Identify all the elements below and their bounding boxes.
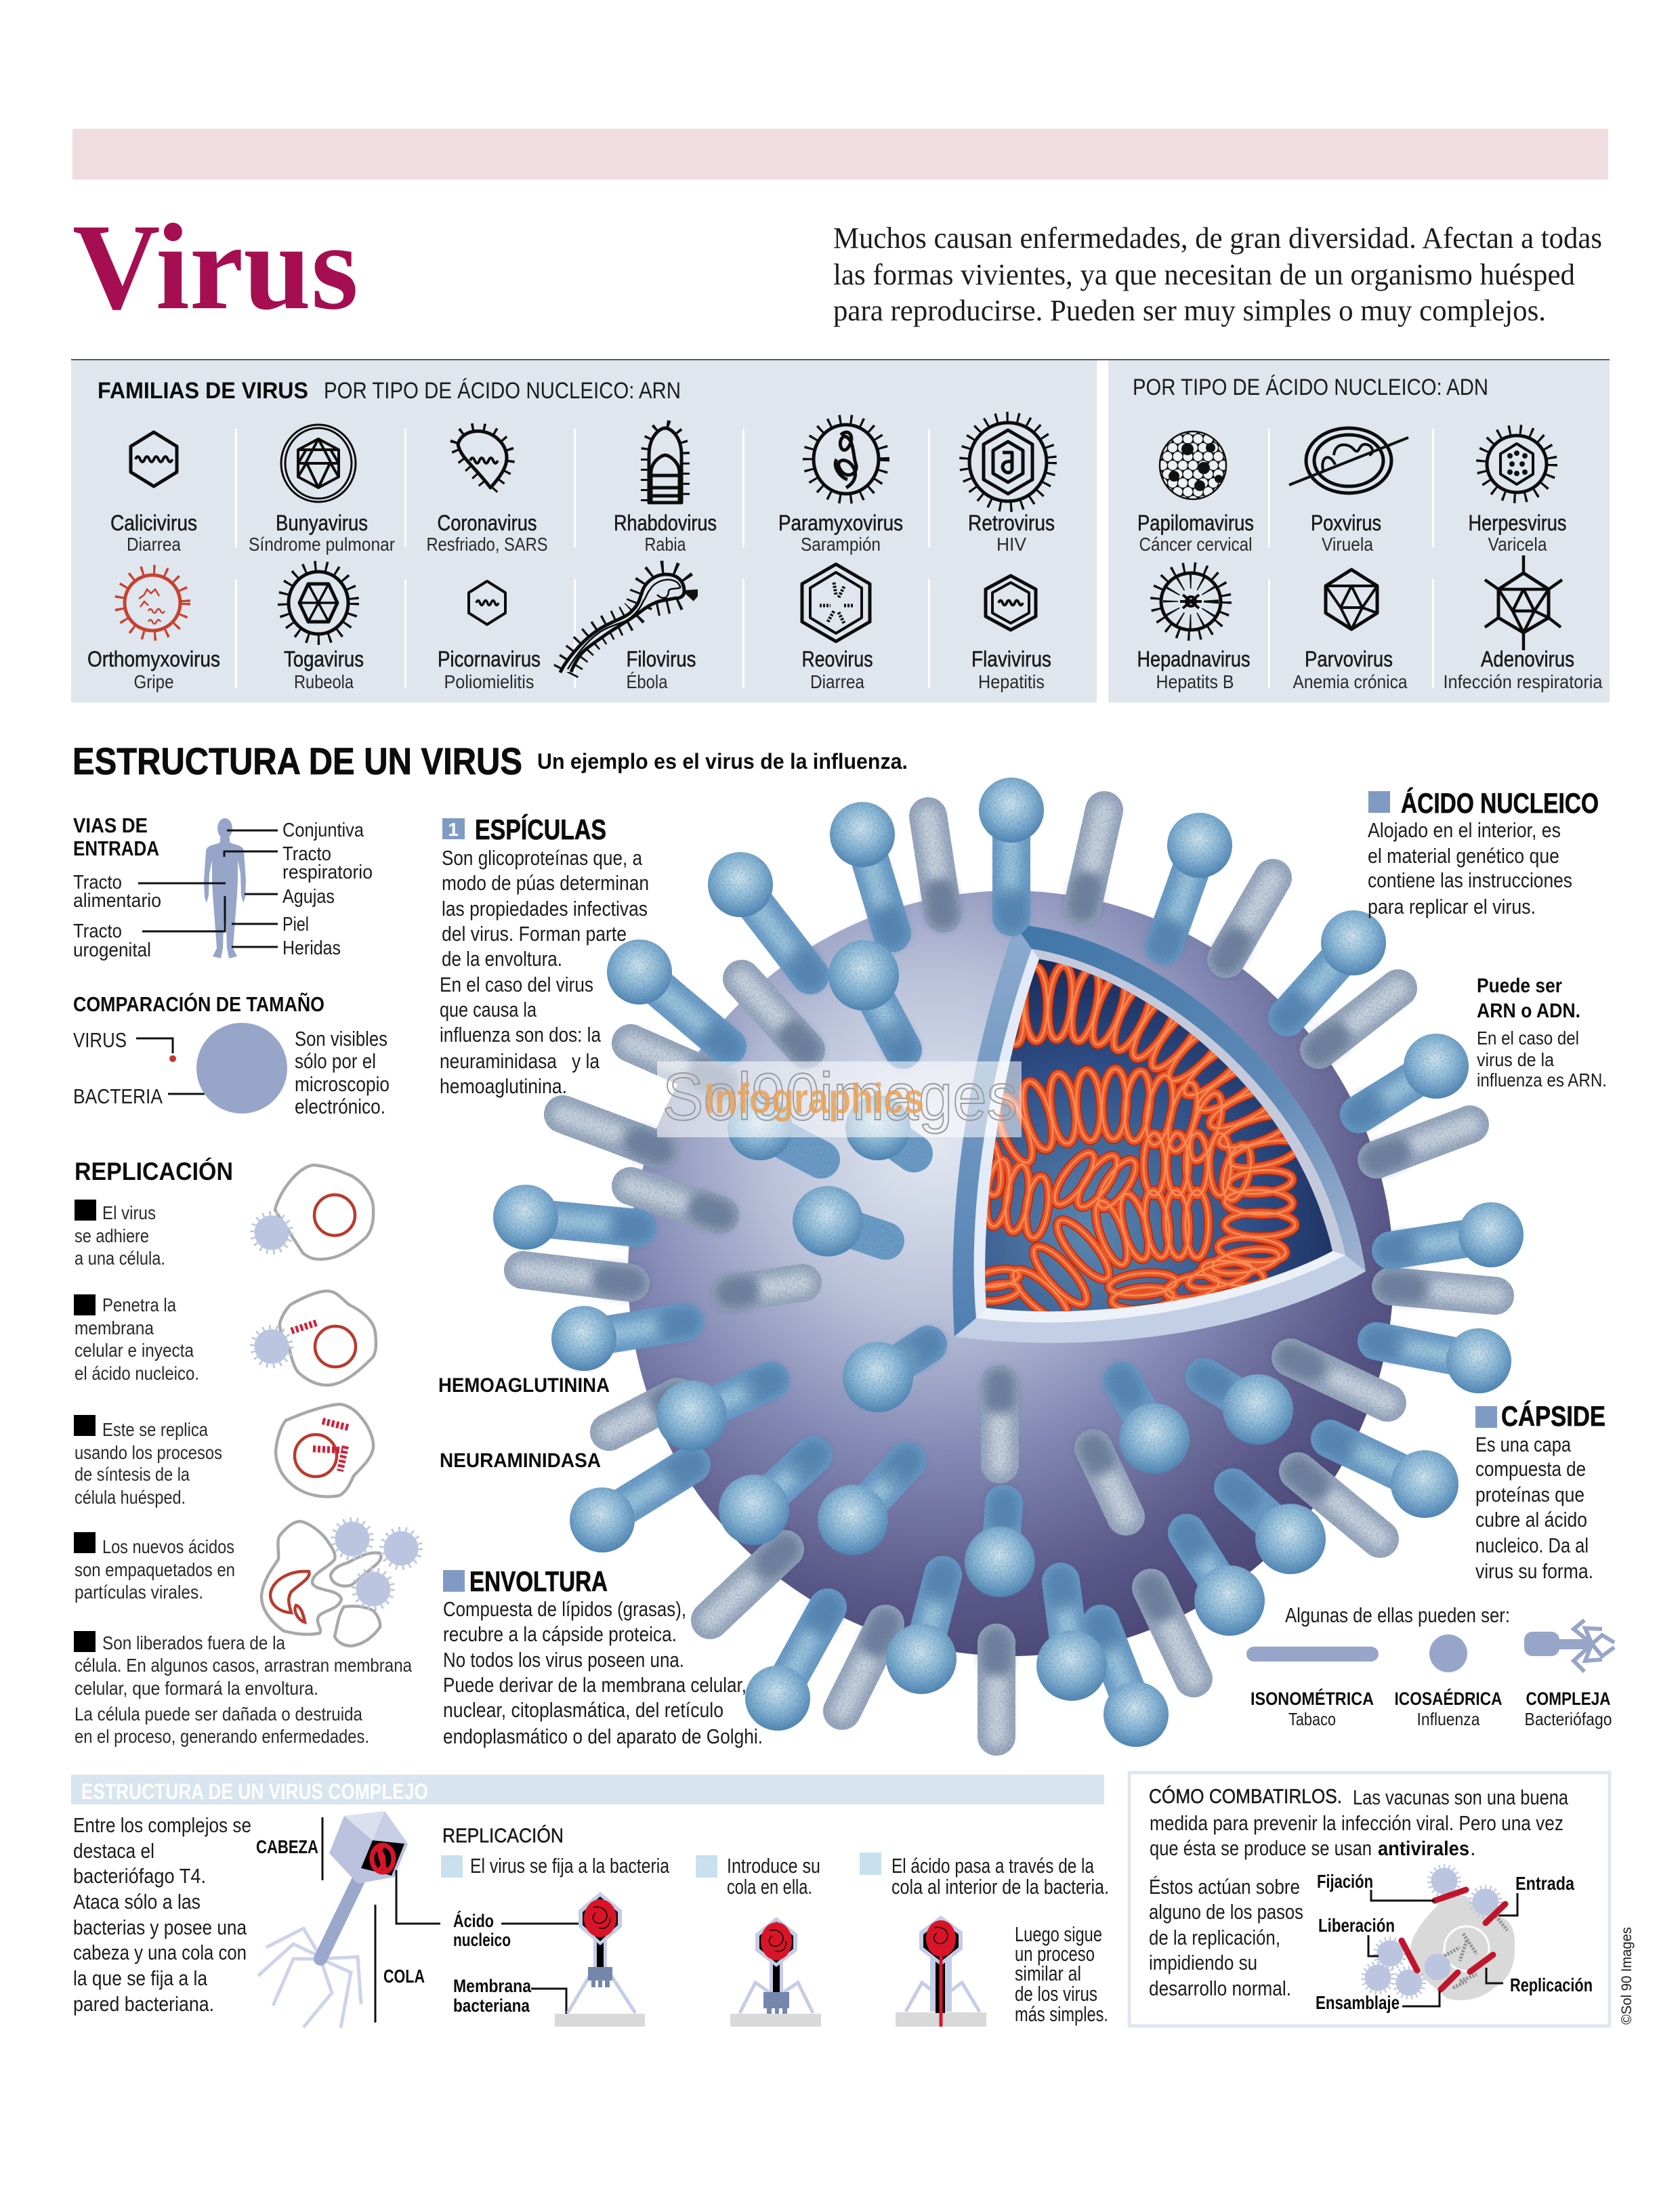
labels ARN row 2: Poliomielitis xyxy=(444,671,534,692)
step 2: membrana xyxy=(75,1317,154,1338)
icon: retrovirus xyxy=(967,420,1049,504)
combat text left: desarrollo normal. xyxy=(1149,1976,1291,2000)
heading: vias de entrada: VIAS DE xyxy=(73,813,148,837)
band heading xyxy=(71,1775,1104,1804)
panel: comparacion de tamaño: BACTERIA xyxy=(73,1084,163,1108)
step 2 text: Introduce su xyxy=(727,1854,820,1878)
heading: estructura de un virus xyxy=(72,740,908,782)
labels ARN row 2: Diarrea xyxy=(810,671,864,692)
icon: reovirus xyxy=(802,564,870,641)
bacteria circle xyxy=(196,1023,287,1114)
capsid shapes legend: Algunas de ellas pueden ser: xyxy=(1285,1603,1510,1627)
callout: especulas: hemoaglutinina. xyxy=(440,1074,567,1098)
callout: acido nucleico xyxy=(1368,787,1599,918)
entry labels: Tracto xyxy=(282,843,331,865)
panel: familias de virus ARN xyxy=(71,359,1610,702)
antiviral diagram xyxy=(1364,1867,1517,2006)
intro text xyxy=(73,1813,251,2016)
callout: arn o adn: Puede ser xyxy=(1477,975,1562,997)
closing text: de los virus xyxy=(1015,1982,1097,2006)
callout: especulas: En el caso del virus xyxy=(440,973,593,996)
copyright: ©Sol 90 Images xyxy=(1619,1927,1635,2025)
intro text: bacterias y posee una xyxy=(73,1916,247,1939)
panel: comparacion de tamaño: VIRUS xyxy=(73,1028,127,1052)
labels ARN row 2: Rubeola xyxy=(294,671,354,692)
combat text top: CÓMO COMBATIRLOS. xyxy=(1149,1785,1342,1808)
labels ARN row 1: Rabia xyxy=(645,534,686,555)
labels ARN row 2: Ébola xyxy=(626,671,668,692)
title: Virus xyxy=(72,199,358,335)
combat text left: alguno de los pasos xyxy=(1149,1900,1303,1924)
size note: microscopio xyxy=(295,1072,390,1096)
icon: isonometrica xyxy=(1246,1647,1379,1662)
labels ARN row 1: Retrovirus xyxy=(968,511,1055,535)
callout: capside: Es una capa xyxy=(1475,1433,1572,1456)
combat text top: medida para prevenir la infección viral. Pero una vez xyxy=(1150,1811,1563,1835)
entry labels: Agujas xyxy=(282,886,335,908)
combat text top: Las vacunas son una buena xyxy=(1353,1785,1569,1809)
icon: cell step 2 xyxy=(253,1291,376,1385)
size note: Son visibles xyxy=(295,1027,387,1051)
labels ADN row 2: Parvovirus xyxy=(1305,647,1393,671)
callout: envoltura: recubre a la cápside proteica. xyxy=(443,1622,677,1646)
band heading: ESTRUCTURA DE UN VIRUS COMPLEJO xyxy=(81,1779,428,1804)
icon: orthomyxovirus xyxy=(123,573,182,633)
step 2: Penetra la xyxy=(102,1294,176,1315)
step 3 text: cola al interior de la bacteria. xyxy=(891,1875,1109,1899)
callout: capside xyxy=(1475,1400,1605,1583)
icon: body silhouette xyxy=(204,818,246,958)
sphere envelope xyxy=(628,891,1393,1656)
step 4: partículas virales. xyxy=(75,1582,203,1603)
icon: adenovirus xyxy=(1485,555,1562,650)
step 5: La célula puede ser dañada o destruida xyxy=(75,1704,362,1725)
labels ARN row 1: Rhabdovirus xyxy=(614,511,717,535)
intro text: destaca el xyxy=(73,1839,154,1863)
step 5 xyxy=(74,1631,412,1747)
icon: filovirus xyxy=(560,574,684,673)
labels ADN row 1: Herpesvirus xyxy=(1469,511,1566,535)
callout: especulas xyxy=(440,813,649,1098)
step 2: celular e inyecta xyxy=(75,1340,194,1361)
labels ARN row 2: Reovirus xyxy=(802,647,873,671)
combat text left: Éstos actúan sobre xyxy=(1149,1875,1300,1899)
antiviral labels: Replicación xyxy=(1510,1974,1593,1995)
callout: capside: cubre al ácido xyxy=(1475,1508,1587,1531)
heading: estructura de un virus: ESTRUCTURA DE UN VIRUS xyxy=(72,740,522,782)
cutaway capsid xyxy=(952,925,1366,1343)
panel: comparacion de tamaño xyxy=(73,992,390,1118)
callout: capside: proteínas que xyxy=(1475,1483,1584,1506)
labels ARN row 1: Paramyxovirus xyxy=(778,511,903,535)
panel heading ADN: POR TIPO DE ÁCIDO NUCLEICO: ADN xyxy=(1133,375,1488,400)
entry labels: Conjuntiva xyxy=(282,820,364,841)
callout: especulas: las propiedades infectivas xyxy=(442,897,648,921)
antiviral labels: Entrada xyxy=(1515,1873,1574,1894)
phage labels: Membrana xyxy=(453,1976,532,1996)
step 2 text xyxy=(696,1854,820,1899)
phage labels xyxy=(256,1817,583,2023)
callout: especulas: que causa la xyxy=(440,998,537,1021)
neuraminidase spikes xyxy=(523,810,1495,1737)
diagram: phage inserts tail xyxy=(730,1917,821,2027)
watermark: Infographics xyxy=(705,1076,924,1122)
phage labels: Ácido xyxy=(453,1910,494,1931)
step 5: Son liberados fuera de la xyxy=(102,1632,285,1653)
callout: envoltura xyxy=(443,1565,763,1748)
callout: capside: CÁPSIDE xyxy=(1501,1400,1605,1432)
combat text top: antivirales xyxy=(1378,1838,1469,1860)
icon: cell step 3 xyxy=(276,1404,373,1497)
icon: herpesvirus xyxy=(1484,433,1549,495)
step 2 text: cola en ella. xyxy=(727,1875,812,1899)
step 1: El virus xyxy=(102,1202,156,1223)
panel: replicacion xyxy=(74,1157,419,1747)
labels ARN row 1: HIV xyxy=(996,534,1026,555)
step 4 xyxy=(74,1532,235,1603)
icon: paramyxovirus xyxy=(811,423,881,496)
icon: cell step 4 xyxy=(261,1521,419,1646)
entry labels: Tracto xyxy=(73,921,122,942)
callout: hemoaglutinina: HEMOAGLUTININA xyxy=(438,1374,610,1397)
callout: especulas: modo de púas determinan xyxy=(442,871,649,895)
spikes xyxy=(493,778,1524,1747)
labels ARN row 1: Bunyavirus xyxy=(276,511,368,535)
combat text left: impidiendo su xyxy=(1149,1951,1257,1974)
step 5: célula. En algunos casos, arrastran membrana xyxy=(75,1655,412,1676)
labels ADN row 2: Hepatits B xyxy=(1156,671,1234,692)
callout: arn o adn xyxy=(1477,975,1607,1091)
heading: vias de entrada: ENTRADA xyxy=(73,837,159,860)
antiviral labels: Fijación xyxy=(1317,1871,1373,1892)
entry labels: Heridas xyxy=(282,937,341,959)
labels ARN row 1: Calicivirus xyxy=(110,511,197,535)
callout: capside: virus su forma. xyxy=(1475,1559,1593,1583)
intro text: pared bacteriana. xyxy=(73,1992,214,2016)
callout: acido nucleico: para replicar el virus. xyxy=(1368,895,1536,918)
step 4: Los nuevos ácidos xyxy=(102,1536,234,1557)
closing text xyxy=(1015,1922,1108,2026)
legend labels: Bacteriófago xyxy=(1524,1709,1612,1729)
intro text: para reproducirse. Pueden ser muy simples o muy complejos. xyxy=(833,294,1546,327)
icon: togavirus xyxy=(286,569,351,637)
antiviral labels xyxy=(1316,1871,1593,2013)
callout: envoltura: ENVOLTURA xyxy=(469,1565,608,1597)
legend labels xyxy=(1251,1688,1612,1729)
heading: vias de entrada xyxy=(73,813,159,860)
callout: capside: compuesta de xyxy=(1475,1457,1586,1481)
step 1 text: El virus se fija a la bacteria xyxy=(470,1854,670,1878)
icon: flavivirus xyxy=(986,576,1036,630)
panel heading ARN: POR TIPO DE ÁCIDO NUCLEICO: ARN xyxy=(324,378,681,404)
callout: acido nucleico: Alojado en el interior, es xyxy=(1368,818,1561,842)
labels ARN row 2: Filovirus xyxy=(626,647,696,671)
antiviral labels: Liberación xyxy=(1318,1915,1395,1936)
callout: capside: nucleico. Da al xyxy=(1475,1533,1589,1557)
step 2 xyxy=(74,1294,199,1384)
labels ARN row 1: Coronavirus xyxy=(438,511,537,535)
icon: cell step 1 xyxy=(253,1165,373,1259)
callout: envoltura: No todos los virus poseen una. xyxy=(443,1648,684,1672)
icon: bacteriophage T4 xyxy=(258,1811,408,2028)
step 3 text xyxy=(860,1853,1109,1899)
labels ARN row 2: Orthomyxovirus xyxy=(87,647,220,671)
legend labels: ICOSAÉDRICA xyxy=(1394,1688,1503,1709)
panel: familias de virus ADN xyxy=(1108,360,1610,702)
callout: arn o adn: En el caso del xyxy=(1477,1028,1579,1049)
top colour band xyxy=(72,129,1608,179)
callout: especulas: del virus. Forman parte xyxy=(442,922,627,946)
entry labels: respiratorio xyxy=(282,862,373,883)
hemagglutinin stems xyxy=(526,810,1491,1714)
labels ADN row 2: Anemia crónica xyxy=(1293,671,1408,692)
callout: arn o adn: influenza es ARN. xyxy=(1477,1070,1607,1091)
phage labels: COLA xyxy=(383,1966,425,1987)
entry labels: Piel xyxy=(282,914,309,935)
callout: neuraminidasa: NEURAMINIDASA xyxy=(440,1450,601,1472)
phage labels: nucleico xyxy=(453,1930,511,1950)
icon: compleja xyxy=(1524,1620,1614,1672)
watermark: Sol90images xyxy=(663,1059,1017,1134)
step 3: usando los procesos xyxy=(75,1442,222,1463)
icon: rhabdovirus xyxy=(649,428,681,503)
panel: comparacion de tamaño: COMPARACIÓN DE TAMAÑO xyxy=(73,992,324,1016)
callout: envoltura: Puede derivar de la membrana celular, xyxy=(443,1673,747,1697)
phage labels: CABEZA xyxy=(256,1836,318,1857)
labels ARN row 2: Picornavirus xyxy=(438,647,541,671)
labels ARN row 1: Resfriado, SARS xyxy=(427,534,547,555)
labels ADN row 1: Viruela xyxy=(1322,534,1373,555)
labels ADN row 1: Papilomavirus xyxy=(1137,511,1254,535)
main virus illustration xyxy=(493,778,1524,1747)
icon: poxvirus xyxy=(1289,428,1408,493)
labels ADN row 1: Cáncer cervical xyxy=(1139,534,1252,555)
icon: bunyavirus xyxy=(281,425,356,502)
legend labels: Tabaco xyxy=(1288,1709,1336,1729)
callout: envoltura: Compuesta de lípidos (grasas), xyxy=(443,1597,686,1621)
intro text: Muchos causan enfermedades, de gran diversidad. Afectan a todas xyxy=(833,221,1602,255)
callout: acido nucleico: ÁCIDO NUCLEICO xyxy=(1401,787,1599,819)
panel: replicacion: REPLICACIÓN xyxy=(75,1157,233,1185)
labels ARN row 1: Diarrea xyxy=(127,534,181,555)
closing text: más simples. xyxy=(1015,2002,1108,2026)
replicacion heading: REPLICACIÓN xyxy=(442,1825,564,1847)
size note: electrónico. xyxy=(295,1095,385,1118)
step 1 xyxy=(75,1200,165,1269)
callout: especulas: Son glicoproteínas que, a xyxy=(442,846,643,870)
step 3: de síntesis de la xyxy=(75,1464,190,1485)
callout: envoltura: nuclear, citoplasmática, del retículo xyxy=(443,1698,723,1722)
callout: especulas: neuraminidasa y la xyxy=(440,1049,600,1073)
callout: acido nucleico: contiene las instrucciones xyxy=(1368,868,1572,892)
labels ADN row 2: Adenovirus xyxy=(1481,647,1574,671)
icon: parvovirus xyxy=(1326,570,1377,629)
closing text: Luego sigue xyxy=(1015,1922,1102,1946)
callout: especulas: de la envoltura. xyxy=(442,947,562,971)
callout: envoltura: endoplasmático o del aparato de Golghi. xyxy=(443,1725,763,1748)
combat text top xyxy=(1149,1785,1569,1860)
intro text: Ataca sólo a las xyxy=(73,1890,201,1913)
callout: arn o adn: virus de la xyxy=(1477,1049,1554,1070)
labels ADN row 2 xyxy=(1137,647,1603,692)
labels ARN row 1 xyxy=(110,511,1055,555)
virus dot xyxy=(169,1055,176,1062)
icon: picornavirus xyxy=(469,581,505,625)
step 1: se adhiere xyxy=(75,1225,149,1246)
intro text: bacteriófago T4. xyxy=(73,1864,206,1888)
intro text: cabeza y una cola con xyxy=(73,1941,247,1964)
callout: acido nucleico: el material genético que xyxy=(1368,844,1559,868)
labels ARN row 1: Síndrome pulmonar xyxy=(249,534,395,555)
legend labels: Influenza xyxy=(1417,1709,1480,1729)
entry labels: Tracto xyxy=(73,872,122,893)
step 3 text: El ácido pasa a través de la xyxy=(891,1854,1095,1878)
combat text top: que ésta se produce se usan xyxy=(1150,1836,1372,1860)
labels ADN row 1 xyxy=(1137,511,1566,555)
step 5: celular, que formará la envoltura. xyxy=(75,1678,318,1699)
antiviral labels: Ensamblaje xyxy=(1316,1992,1400,2013)
closing text: similar al xyxy=(1015,1962,1081,1985)
capsid shapes legend xyxy=(1246,1603,1614,1729)
legend labels: COMPLEJA xyxy=(1526,1689,1611,1709)
step 4: son empaquetados en xyxy=(75,1559,235,1580)
diagram: phage attaches xyxy=(555,1892,645,2027)
size note xyxy=(295,1027,390,1118)
entry labels: urogenital xyxy=(73,939,151,961)
callout: especulas: influenza son dos: la xyxy=(440,1023,602,1046)
intro text: Entre los complejos se xyxy=(73,1813,251,1837)
size note: sólo por el xyxy=(295,1049,376,1073)
nucleic acid coils xyxy=(973,965,1300,1328)
labels ADN row 1: Poxvirus xyxy=(1311,511,1381,535)
combat text top: . xyxy=(1470,1836,1476,1860)
labels ADN row 1: Varicela xyxy=(1488,534,1547,555)
intro text: las formas vivientes, ya que necesitan de un organismo huésped xyxy=(833,258,1575,291)
spike heads xyxy=(493,778,1524,1747)
step 5: en el proceso, generando enfermedades. xyxy=(75,1726,369,1747)
intro text: la que se fija a la xyxy=(73,1966,208,1990)
labels ARN row 2: Togavirus xyxy=(284,647,364,671)
callout: arn o adn: ARN o ADN. xyxy=(1477,1000,1580,1022)
labels ADN row 2: Infección respiratoria xyxy=(1443,671,1603,692)
step 3 xyxy=(74,1415,222,1508)
diagram: acid enters bacteria xyxy=(896,1916,986,2027)
labels ARN row 2: Flavivirus xyxy=(971,647,1051,671)
panel: estructura de un virus complejo xyxy=(71,1775,1109,2028)
labels ADN row 2: Hepadnavirus xyxy=(1137,647,1251,671)
phage labels: bacteriana xyxy=(453,1995,530,2016)
step 3: célula huésped. xyxy=(75,1487,186,1508)
panel: vias de entrada xyxy=(73,813,373,961)
combat text left xyxy=(1149,1875,1303,2000)
labels ARN row 1: Sarampión xyxy=(801,534,881,555)
panel: como combatirlos xyxy=(1129,1773,1610,2026)
icon: icosaedrica xyxy=(1429,1634,1467,1672)
closing text: un proceso xyxy=(1015,1942,1095,1966)
icon: calicivirus xyxy=(131,432,177,486)
icon: coronavirus xyxy=(458,431,507,488)
step 1: a una célula. xyxy=(75,1248,165,1269)
legend labels: ISONOMÉTRICA xyxy=(1251,1688,1374,1709)
icon: papilomavirus xyxy=(1160,431,1226,499)
entry labels: alimentario xyxy=(73,890,161,912)
callout: especulas: 1 xyxy=(448,819,459,840)
heading: estructura de un virus: Un ejemplo es el virus de la influenza. xyxy=(537,749,908,774)
step 3: Este se replica xyxy=(102,1419,208,1440)
panel heading ARN xyxy=(98,378,681,404)
intro text xyxy=(833,221,1602,327)
step 2: el ácido nucleico. xyxy=(75,1363,199,1384)
labels ARN row 2: Gripe xyxy=(134,671,173,692)
labels ARN row 2 xyxy=(87,647,1051,692)
icon: hepadnavirus xyxy=(1158,570,1223,633)
combat text left: de la replicación, xyxy=(1149,1926,1280,1949)
entry labels xyxy=(73,820,373,961)
callout: especulas: ESPÍCULAS xyxy=(475,813,606,845)
panel heading ARN: FAMILIAS DE VIRUS xyxy=(98,378,308,404)
labels ARN row 2: Hepatitis xyxy=(978,671,1045,692)
